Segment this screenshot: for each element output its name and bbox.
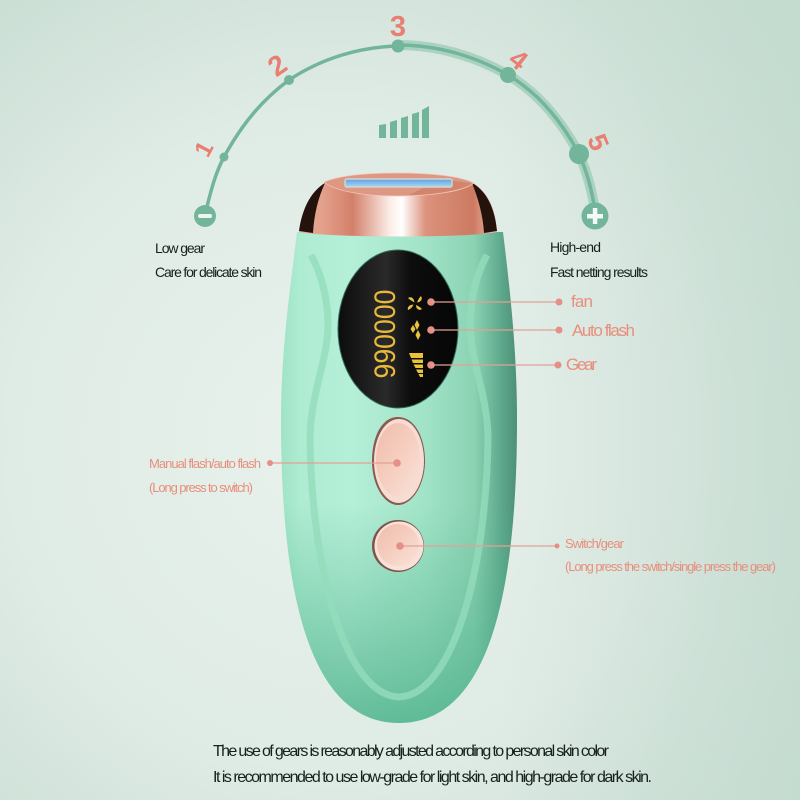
display screen <box>338 250 458 408</box>
label: gear: Gear <box>566 355 597 374</box>
label: switch gear: Switch/gear <box>565 536 625 551</box>
leader lines <box>270 302 559 546</box>
gear dots <box>220 40 589 164</box>
footer note: The use of gears is reasonably adjusted according to personal skin color <box>213 743 610 760</box>
arc: low gears <box>205 46 398 215</box>
icon: fan <box>408 296 422 310</box>
cap top <box>324 173 474 196</box>
cap <box>299 173 497 236</box>
label: fan: fan <box>571 292 593 311</box>
label: switch gear <box>565 536 776 574</box>
cap right black strip <box>472 183 497 233</box>
icon: signal bars <box>379 106 429 138</box>
gear arc scale <box>189 11 615 230</box>
label: manual flash: (Long press to switch) <box>149 480 253 495</box>
footer note: It is recommended to use low-grade for light skin, and high-grade for dark skin. <box>213 769 652 786</box>
label: manual flash: Manual flash/auto flash <box>149 456 261 471</box>
label: low gear: Low gear <box>155 240 205 256</box>
gear numbers: 4 <box>503 43 534 76</box>
lens window <box>345 179 452 187</box>
plus button <box>582 202 608 230</box>
footer note <box>213 743 652 786</box>
gear numbers: 3 <box>390 11 406 43</box>
label: low gear: Care for delicate skin <box>155 264 262 280</box>
digits: 990000 <box>369 290 402 378</box>
icon: gear level <box>409 353 423 377</box>
label: high-end <box>550 239 648 280</box>
minus button <box>194 205 216 227</box>
gear numbers: 1 <box>189 137 219 161</box>
button: switch <box>372 520 424 572</box>
label: manual flash <box>149 456 261 495</box>
cap rim <box>299 183 497 236</box>
gear numbers <box>189 11 615 161</box>
leader dots <box>267 298 562 550</box>
label: auto flash: Auto flash <box>572 321 635 340</box>
button: manual flash <box>372 417 425 505</box>
arc: high gears core <box>398 45 596 215</box>
label: low gear <box>155 240 262 280</box>
arc: high gears wide band <box>398 45 596 215</box>
gear numbers: 2 <box>262 48 293 83</box>
gear numbers: 5 <box>581 130 615 155</box>
device <box>281 173 517 723</box>
label: high-end: High-end <box>550 239 601 255</box>
body groove <box>310 255 488 697</box>
label: high-end: Fast netting results <box>550 264 648 280</box>
label: switch gear: (Long press the switch/single press the gear) <box>565 559 776 574</box>
device body <box>281 232 517 723</box>
icon: auto flash <box>410 320 420 340</box>
cap left black strip <box>299 183 325 233</box>
screen dots <box>427 298 435 369</box>
cap top shade <box>409 180 472 195</box>
